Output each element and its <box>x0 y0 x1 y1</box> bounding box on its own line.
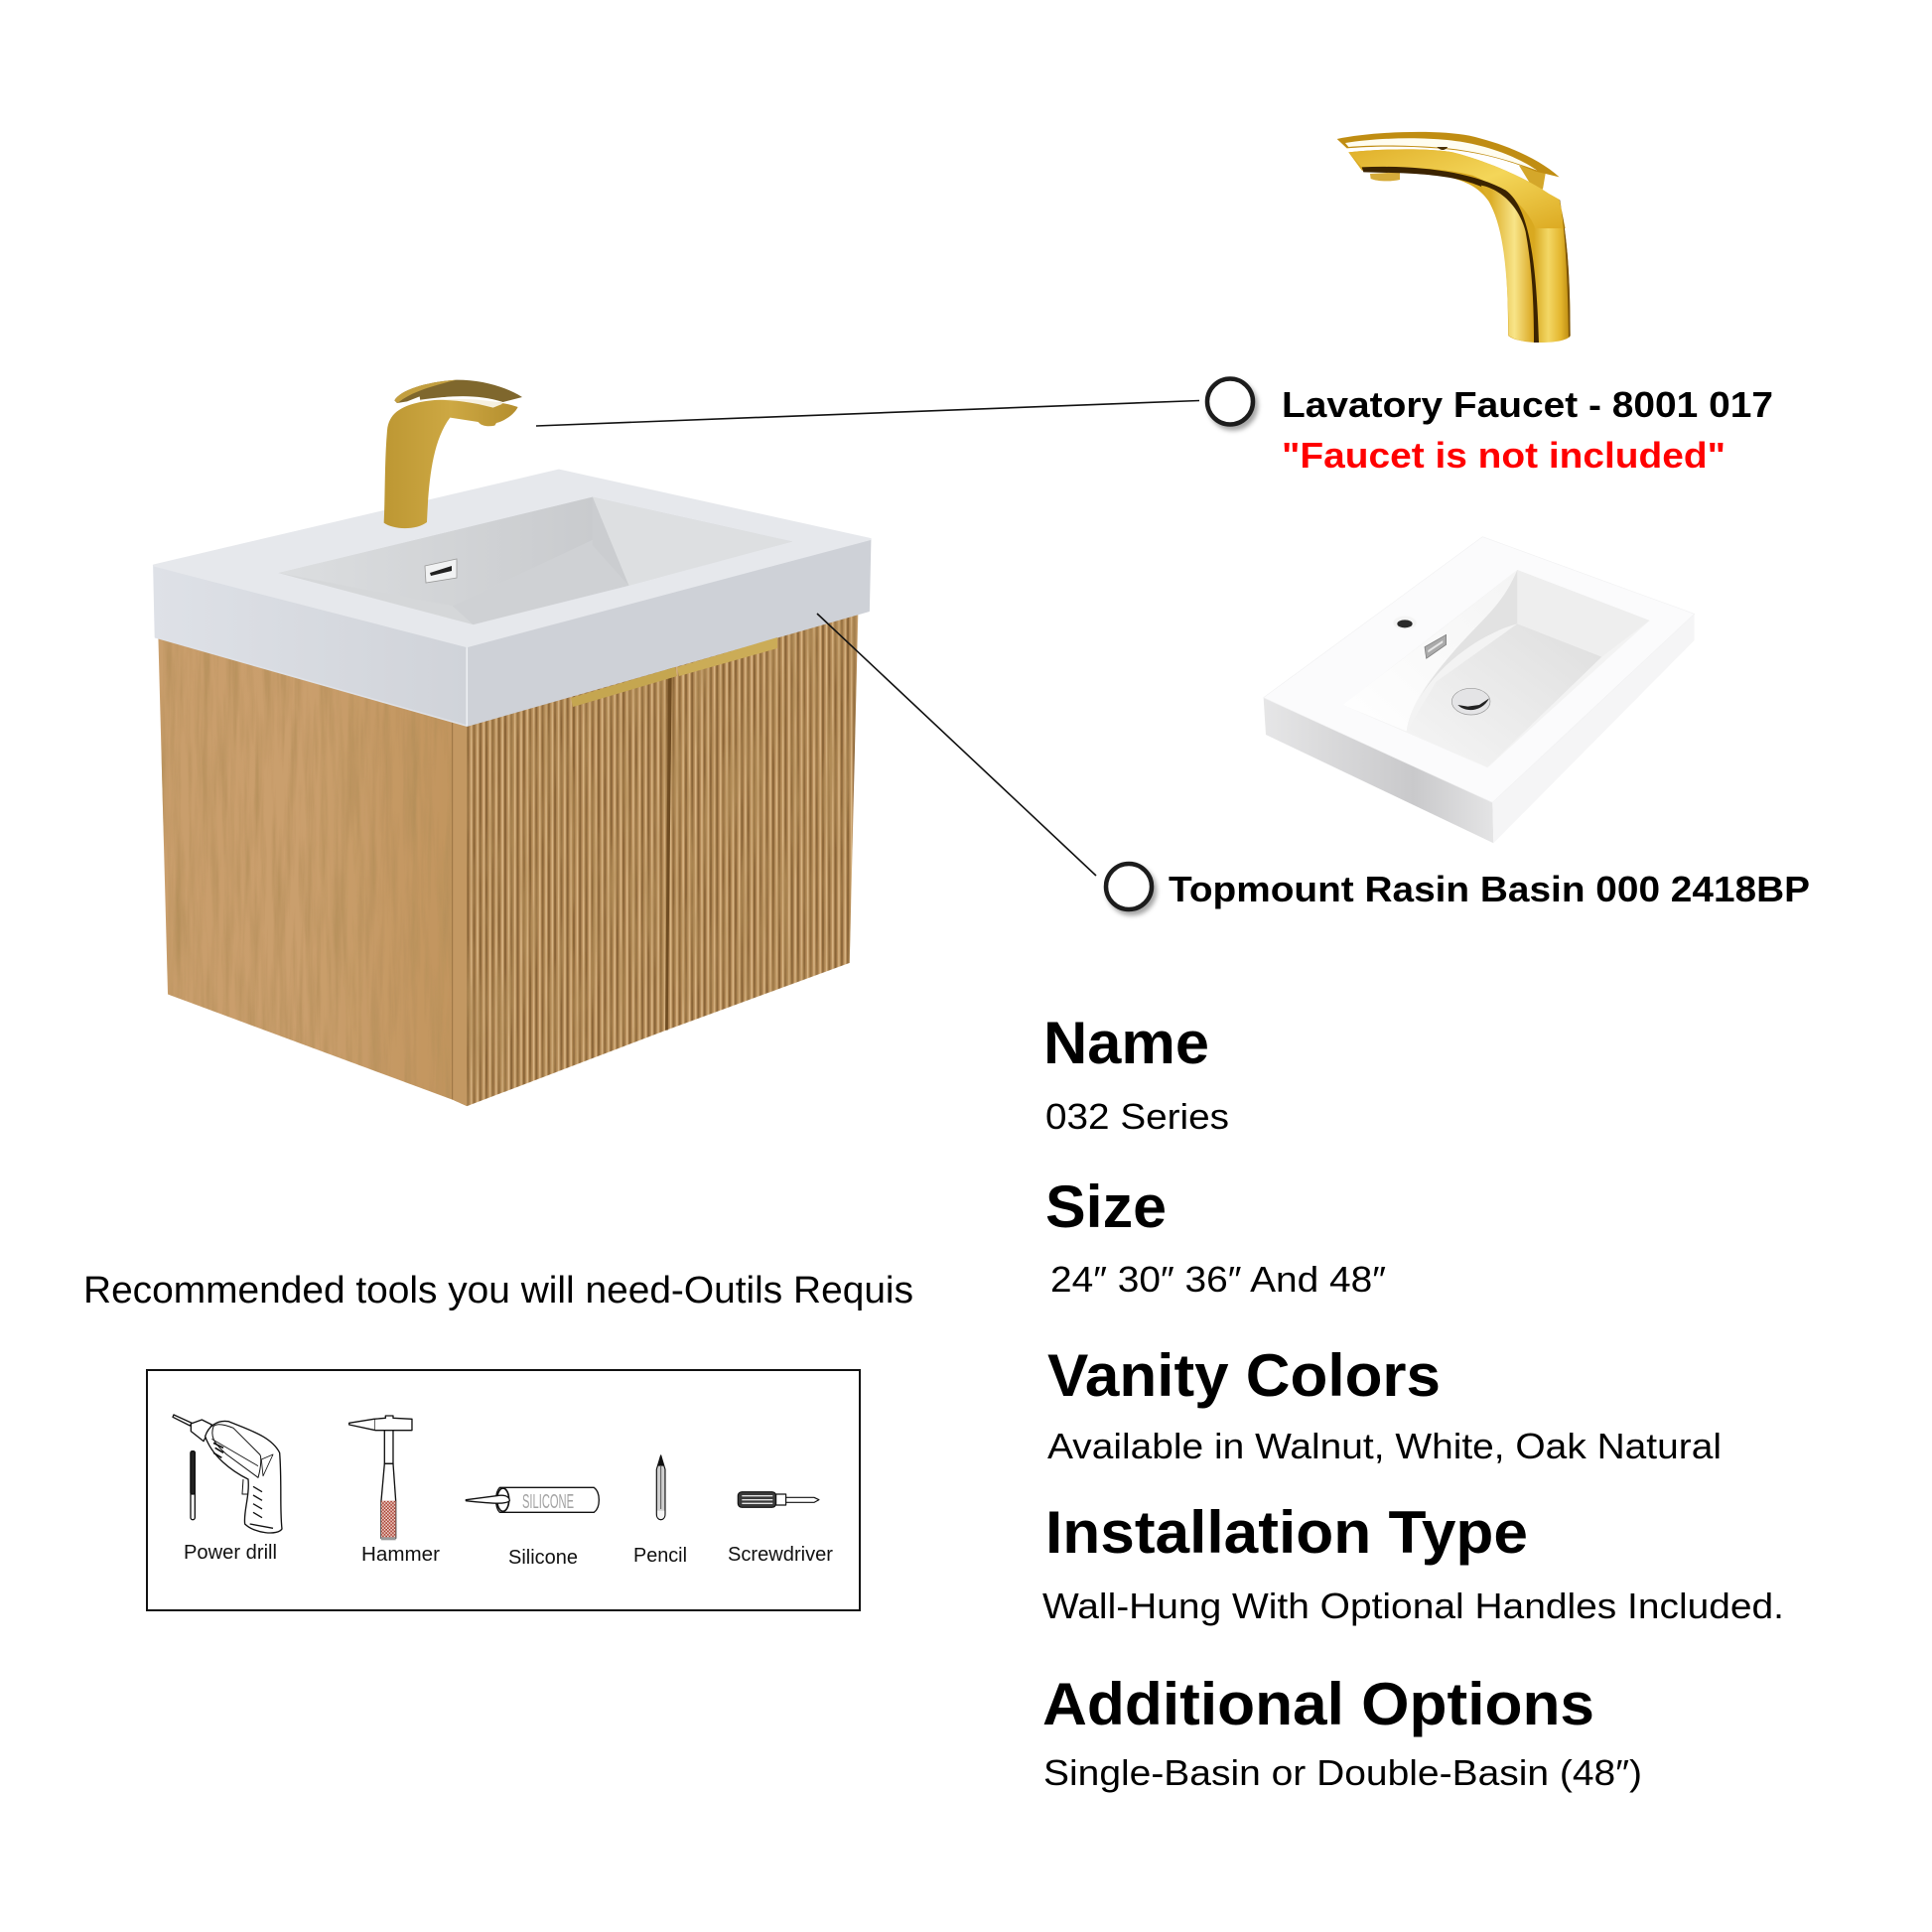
cabinet right door <box>666 601 859 1031</box>
tool: pencil <box>633 1455 687 1567</box>
spec heading: installation type: Installation Type <box>1045 1499 1528 1566</box>
spec heading: size: Size <box>1045 1173 1167 1240</box>
overflow slot <box>425 559 457 583</box>
tool: screwdriver <box>728 1492 833 1566</box>
tool: power drill <box>173 1415 282 1564</box>
spec text: vanity colors: Available in Walnut, White, Oak Natural <box>1047 1426 1722 1466</box>
spec text: name: 032 Series <box>1045 1096 1229 1137</box>
spec heading: name: Name <box>1043 1010 1209 1076</box>
label: pencil: Pencil <box>633 1545 687 1567</box>
tools heading: Recommended tools you will need-Outils Requis <box>83 1270 913 1311</box>
spec heading: additional options: Additional Options <box>1042 1671 1594 1737</box>
callout label: basin: Topmount Rasin Basin 000 2418BP <box>1169 869 1810 909</box>
leader line: faucet <box>536 401 1199 426</box>
sink front face <box>154 566 467 726</box>
sink basin <box>278 497 792 624</box>
cabinet side panel <box>158 626 454 1100</box>
label: screwdriver: Screwdriver <box>728 1544 833 1566</box>
callout warning: faucet not included: "Faucet is not included" <box>1282 435 1725 476</box>
cabinet left door <box>454 661 670 1106</box>
label: silicone: Silicone <box>508 1547 578 1569</box>
label: hammer: Hammer <box>361 1544 440 1566</box>
door handles <box>571 637 777 707</box>
tool: hammer <box>349 1416 440 1566</box>
matte gold faucet <box>384 380 522 528</box>
spec text: additional options: Single-Basin or Double-Basin (48″) <box>1043 1752 1642 1793</box>
sink top surface <box>154 471 871 646</box>
label: silicone cartridge: SILICONE <box>522 1491 574 1513</box>
tool: silicone <box>466 1487 599 1569</box>
label: power drill: Power drill <box>184 1542 277 1564</box>
panel: main vanity product image <box>154 380 871 1106</box>
callout label: faucet: Lavatory Faucet - 8001 017 <box>1282 384 1773 425</box>
product image: gold faucet <box>1337 132 1571 343</box>
callout marker: basin <box>1106 864 1152 909</box>
product image: white basin <box>1264 537 1695 843</box>
spec text: installation type: Wall-Hung With Optional Handles Included. <box>1042 1586 1784 1626</box>
spec heading: vanity colors: Vanity Colors <box>1047 1342 1441 1409</box>
panel: tools box <box>147 1370 860 1610</box>
spec text: size: 24″ 30″ 36″ And 48″ <box>1050 1259 1386 1300</box>
leader line: basin <box>817 614 1096 876</box>
callout marker: faucet <box>1207 379 1253 425</box>
